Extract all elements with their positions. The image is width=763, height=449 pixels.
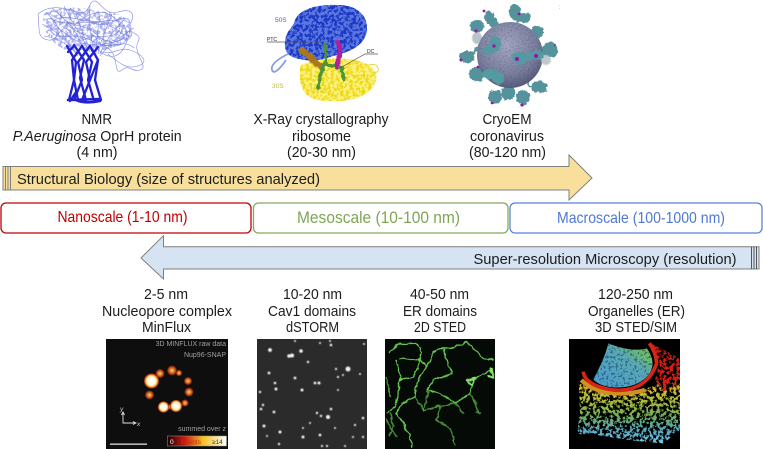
red crescent — [583, 343, 657, 390]
nucleopore ring: dim spots — [144, 365, 194, 410]
panel: nanoscale — [1, 203, 251, 233]
tRNA: green — [318, 44, 344, 88]
PTC pointer: PTC — [267, 37, 277, 43]
colour scale: 0 — [170, 439, 174, 446]
image: 3D STED/SIM organelle — [569, 339, 680, 449]
30S label: 30S — [272, 83, 284, 90]
nucleopore ring: bright spots — [144, 373, 182, 413]
panel: macroscale — [510, 203, 762, 233]
ER tubule network — [387, 342, 493, 447]
tRNA: orange — [302, 50, 322, 68]
text: NMR caption — [13, 111, 182, 161]
text: X-ray caption: X-Ray crystallography — [254, 111, 389, 128]
magenta glycan dots — [460, 10, 556, 107]
50S label: 50S — [275, 17, 287, 24]
text: STED caption: ER domains — [403, 303, 477, 320]
panel: macroscale: Macroscale (100-1000 nm) — [557, 210, 725, 227]
text: STED caption: 2D STED — [414, 319, 466, 336]
beta barrel — [67, 45, 101, 102]
small marks: : — [559, 5, 561, 11]
arrow: super-resolution microscopy — [141, 236, 759, 279]
text: STED caption: 40-50 nm — [410, 286, 469, 303]
panel: mesoscale: Mesoscale (10-100 nm) — [297, 208, 460, 227]
DC pointer: DC — [367, 49, 375, 55]
text: NMR caption: P.Aeruginosa OprH protein — [13, 128, 182, 145]
text: X-ray caption — [254, 111, 389, 161]
grey spike — [472, 32, 482, 44]
text: dSTORM caption: Cav1 domains — [268, 303, 356, 320]
text: STED/SIM caption: Organelles (ER) — [588, 303, 685, 320]
arrow label: Structural Biology (size of structures analyzed) — [17, 171, 320, 188]
text: STED caption — [403, 286, 477, 336]
text: CryoEM caption — [469, 111, 546, 161]
spikes behind — [459, 4, 558, 104]
dome — [593, 343, 653, 387]
panel: nanoscale: Nanoscale (1-10 nm) — [58, 209, 188, 226]
summed label: summed over z — [178, 426, 226, 433]
image: coronavirus CryoEM — [459, 4, 561, 107]
scale bar — [110, 444, 147, 445]
text: STED/SIM caption: 120-250 nm — [598, 286, 673, 303]
colour scale: Events — [181, 439, 202, 446]
axis labels — [119, 406, 141, 428]
protein loop tangle — [38, 1, 144, 71]
arrow label: Super-resolution Microscopy (resolution) — [474, 251, 736, 268]
text: dSTORM caption — [268, 286, 356, 336]
colour scale — [168, 436, 226, 446]
text: MinFlux caption: Nucleopore complex — [102, 303, 232, 320]
text: CryoEM caption: CryoEM — [482, 111, 532, 128]
image: dSTORM Cav1 domains — [257, 339, 367, 449]
red right wedge — [651, 343, 680, 392]
image: ribosome X-ray structure — [267, 5, 378, 101]
dome speckle — [593, 343, 653, 387]
text: NMR caption: NMR — [82, 111, 112, 128]
orange crescent edge — [581, 380, 645, 393]
axes — [122, 412, 136, 424]
image: STED ER domains — [385, 339, 495, 449]
viral sphere — [477, 22, 543, 88]
colour scale: ≥14 — [212, 439, 223, 446]
text: CryoEM caption: coronavirus — [470, 128, 544, 145]
bright puncta — [259, 340, 365, 447]
protein label: Nup96-SNAP — [184, 352, 226, 359]
image: MinFlux nucleopore — [106, 339, 228, 449]
lower membrane mesh — [577, 375, 680, 443]
protein dense haze — [43, 8, 133, 50]
text: STED/SIM caption: 3D STED/SIM — [595, 319, 677, 336]
grey spike right — [541, 55, 551, 65]
text: X-ray caption: ribosome — [292, 128, 351, 145]
text: X-ray caption: (20-30 nm) — [287, 144, 356, 161]
50S blue subunit — [272, 5, 367, 72]
panel: mesoscale — [254, 203, 508, 233]
text: dSTORM caption: dSTORM — [286, 319, 339, 336]
30S yellow subunit — [300, 59, 378, 101]
text: CryoEM caption: (80-120 nm) — [469, 144, 546, 161]
text: NMR caption: (4 nm) — [76, 144, 118, 161]
axis labels: y — [119, 406, 124, 413]
arrow: structural biology — [3, 155, 592, 200]
image: NMR OprH protein — [38, 1, 144, 102]
axis labels: x — [136, 421, 141, 428]
tRNA: magenta — [336, 42, 341, 67]
text: MinFlux caption: 2-5 nm — [144, 286, 188, 303]
spikes in front — [482, 36, 544, 84]
text: STED/SIM caption — [588, 286, 685, 336]
text: dSTORM caption: 10-20 nm — [283, 286, 342, 303]
image title: 3D MINFLUX raw data — [156, 341, 226, 348]
text: MinFlux caption: MinFlux — [142, 319, 191, 336]
text: MinFlux caption — [102, 286, 232, 336]
